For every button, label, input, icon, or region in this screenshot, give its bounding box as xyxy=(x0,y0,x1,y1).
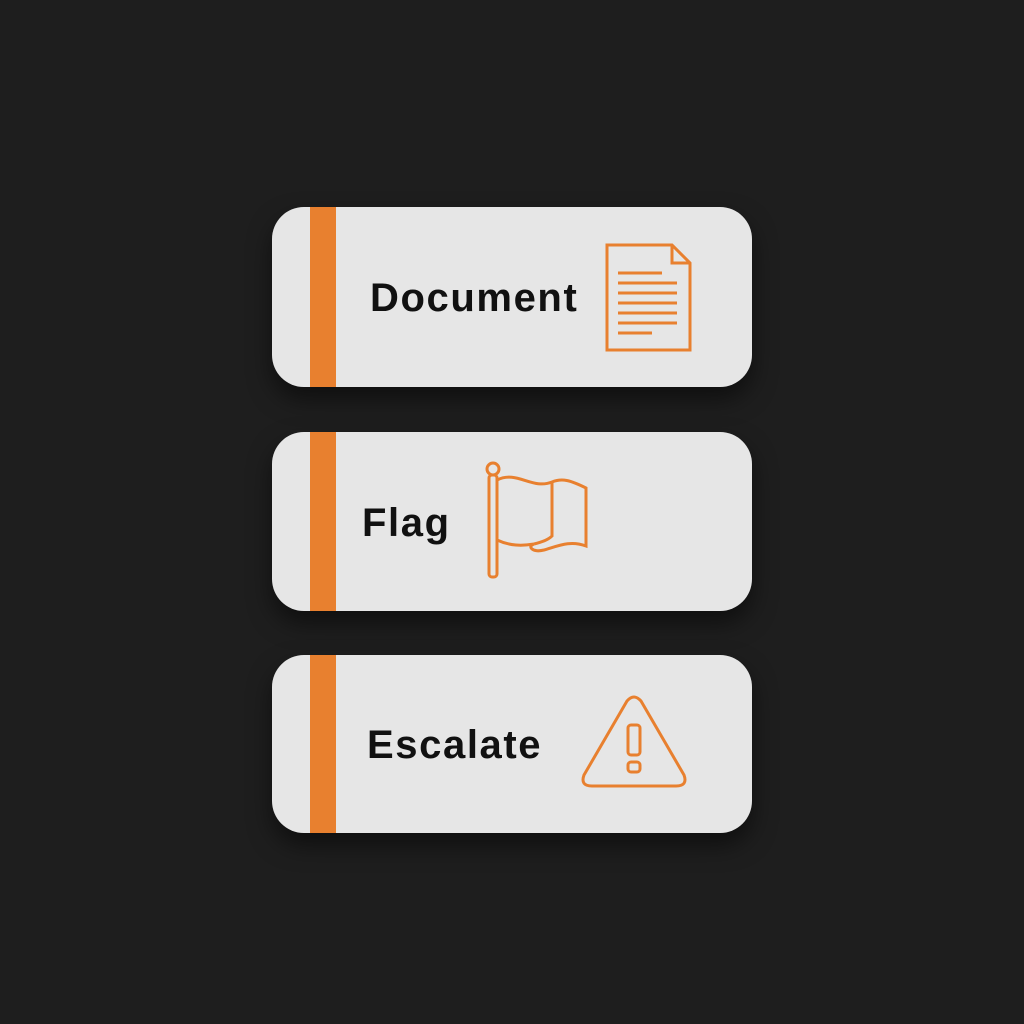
label: Document: Document xyxy=(370,276,578,320)
card: Escalate xyxy=(272,655,752,833)
accent bar xyxy=(310,432,336,611)
accent bar xyxy=(310,655,336,833)
icon: document xyxy=(606,244,692,352)
accent bar xyxy=(310,207,336,387)
icon: warning triangle xyxy=(582,696,686,788)
icon: flag xyxy=(486,462,588,578)
label: Escalate: Escalate xyxy=(367,723,542,767)
card: Flag xyxy=(272,432,752,611)
label: Flag: Flag xyxy=(362,501,451,545)
card: Document xyxy=(272,207,752,387)
